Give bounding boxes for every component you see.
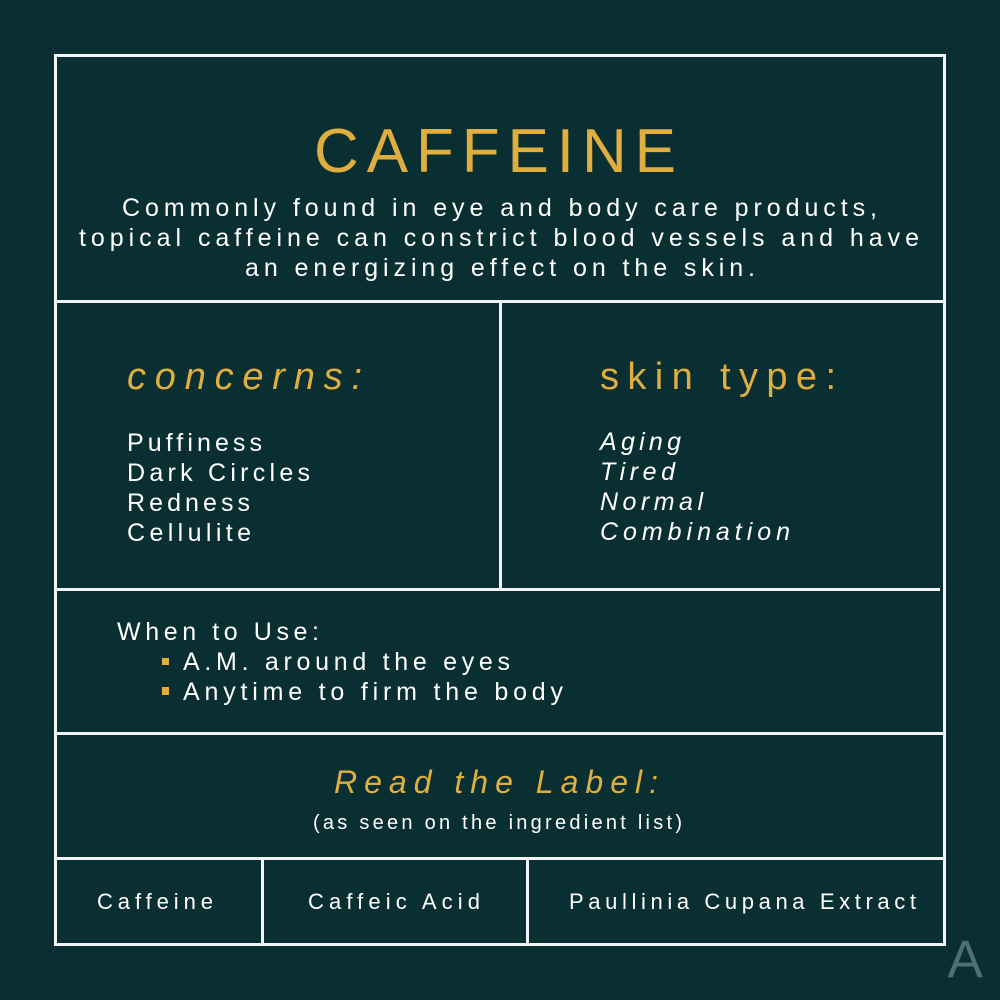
intro text: Commonly found in eye and body care products, xyxy=(122,194,877,222)
bullet item: body use: Anytime to firm the body xyxy=(183,678,564,706)
intro text xyxy=(79,194,919,282)
logo mark: A xyxy=(948,930,984,989)
frame and grid lines xyxy=(56,56,944,944)
concerns list: Puffiness xyxy=(127,429,262,457)
heading: skin type: skin type: xyxy=(600,356,836,398)
panel: skin type xyxy=(598,356,836,546)
skin type list xyxy=(598,428,790,546)
panel: read the label xyxy=(313,764,682,834)
heading: read the label: Read the Label: xyxy=(334,764,658,800)
concerns list: Redness xyxy=(127,489,250,517)
panel: title and intro xyxy=(79,117,919,282)
ingredient: caffeic acid: Caffeic Acid xyxy=(308,889,480,914)
subheading: (as seen on the ingredient list) xyxy=(313,812,682,834)
bullet item: morning use: A.M. around the eyes xyxy=(183,648,510,676)
concerns list: Dark Circles xyxy=(127,459,310,487)
panel: when to use xyxy=(117,618,564,706)
heading: concerns: concerns: xyxy=(127,356,362,398)
skin type list: Normal xyxy=(600,488,704,516)
intro text: an energizing effect on the skin. xyxy=(245,254,755,282)
ingredient: paullinia cupana extract: Paullinia Cupana Extract xyxy=(569,889,916,914)
title: CAFFEINE xyxy=(314,117,676,186)
concerns list: Cellulite xyxy=(127,519,251,547)
panel: concerns xyxy=(127,356,362,547)
skin type list: Tired xyxy=(600,458,676,486)
heading: when to use: When to Use: xyxy=(117,618,319,646)
skin type list: Aging xyxy=(598,428,681,456)
concerns list xyxy=(127,429,310,547)
ingredient: caffeine: Caffeine xyxy=(97,889,213,914)
ingredient names xyxy=(97,889,916,914)
skin type list: Combination xyxy=(600,518,790,546)
intro text: topical caffeine can constrict blood vessels and have xyxy=(79,224,919,252)
